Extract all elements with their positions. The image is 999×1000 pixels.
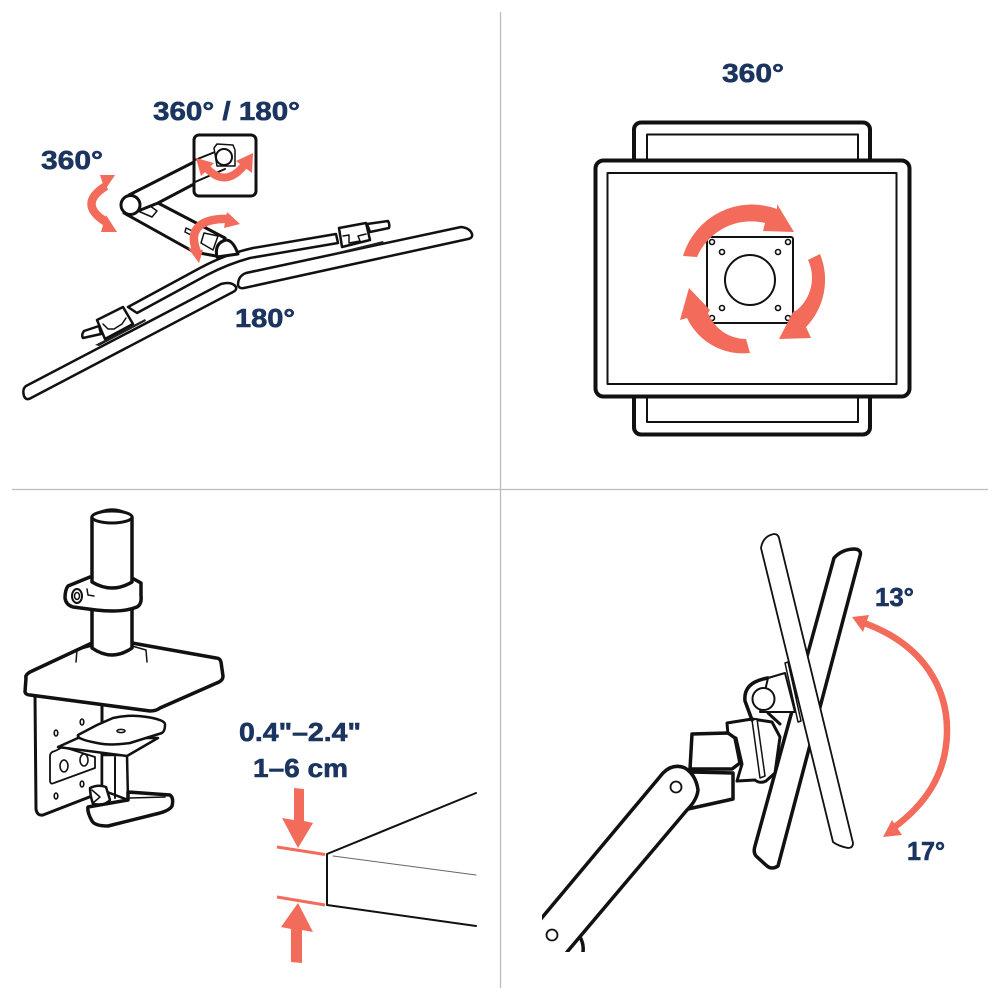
arrow: tilt range (852, 615, 947, 837)
hinge cube (690, 733, 740, 769)
lower arm (124, 195, 225, 256)
clamp top (25, 643, 223, 711)
pole top (92, 511, 132, 523)
panel: tilt (520, 534, 947, 970)
arrow: wrist swivel (196, 153, 253, 178)
left mounting bracket (82, 307, 146, 346)
rotation arrows (680, 204, 825, 353)
thickness markers (277, 847, 325, 905)
arrow: up (281, 903, 313, 963)
label: 360/180: 360° / 180° (153, 96, 300, 126)
panel: desk thickness (239, 717, 476, 963)
arrow: elbow swivel (92, 175, 117, 232)
lower pole (92, 605, 132, 655)
clamp upper jaw (58, 738, 158, 756)
label: inches: 0.4"–2.4" (239, 717, 361, 747)
upper arm (128, 161, 196, 215)
arm clip (542, 764, 735, 952)
clamp column (102, 755, 128, 800)
hinge box (201, 233, 218, 250)
right mounting bracket (330, 221, 389, 254)
panel: dual monitor arm swivel (23, 96, 472, 399)
crossbar (128, 234, 338, 313)
panel: monitor rotation (596, 58, 910, 434)
collar bolt (72, 589, 94, 603)
plate holes (54, 719, 84, 799)
plate recess (50, 747, 95, 784)
label: 360 rotation: 360° (722, 58, 784, 88)
label: 360: 360° (41, 145, 103, 175)
clamp plate (35, 695, 102, 815)
rear monitor, tilted (754, 549, 860, 868)
right monitor, top view (238, 227, 472, 288)
label: 17 degrees: 17° (907, 836, 945, 866)
front monitor (596, 160, 910, 396)
pad hole (117, 729, 125, 733)
front monitor, tilted (761, 534, 853, 848)
hinge block (727, 719, 780, 782)
upper pole (92, 510, 132, 588)
wrist inset (194, 135, 256, 196)
pole boss (76, 646, 147, 662)
post hinge (216, 240, 238, 257)
label: 13 degrees: 13° (875, 582, 914, 612)
arrow: down (282, 788, 313, 848)
arrow: base tilt (188, 212, 240, 263)
desk corner (327, 793, 476, 926)
label: centimetres: 1–6 cm (253, 753, 348, 783)
foot inner edge (130, 797, 165, 798)
panel: desk clamp (25, 510, 223, 826)
clamp foot (88, 792, 173, 826)
clamp knob (90, 786, 110, 804)
left monitor, top view (23, 283, 236, 399)
recess holes (60, 754, 88, 772)
elbow joint (121, 196, 140, 214)
lower arm tab (185, 228, 197, 237)
rear monitor (634, 122, 870, 434)
lower arm slot (138, 200, 157, 217)
tilt pivot (745, 662, 801, 724)
label: 180: 180° (235, 303, 295, 333)
VESA plate (707, 237, 793, 323)
collar (65, 577, 141, 611)
clamp pad (78, 716, 165, 744)
